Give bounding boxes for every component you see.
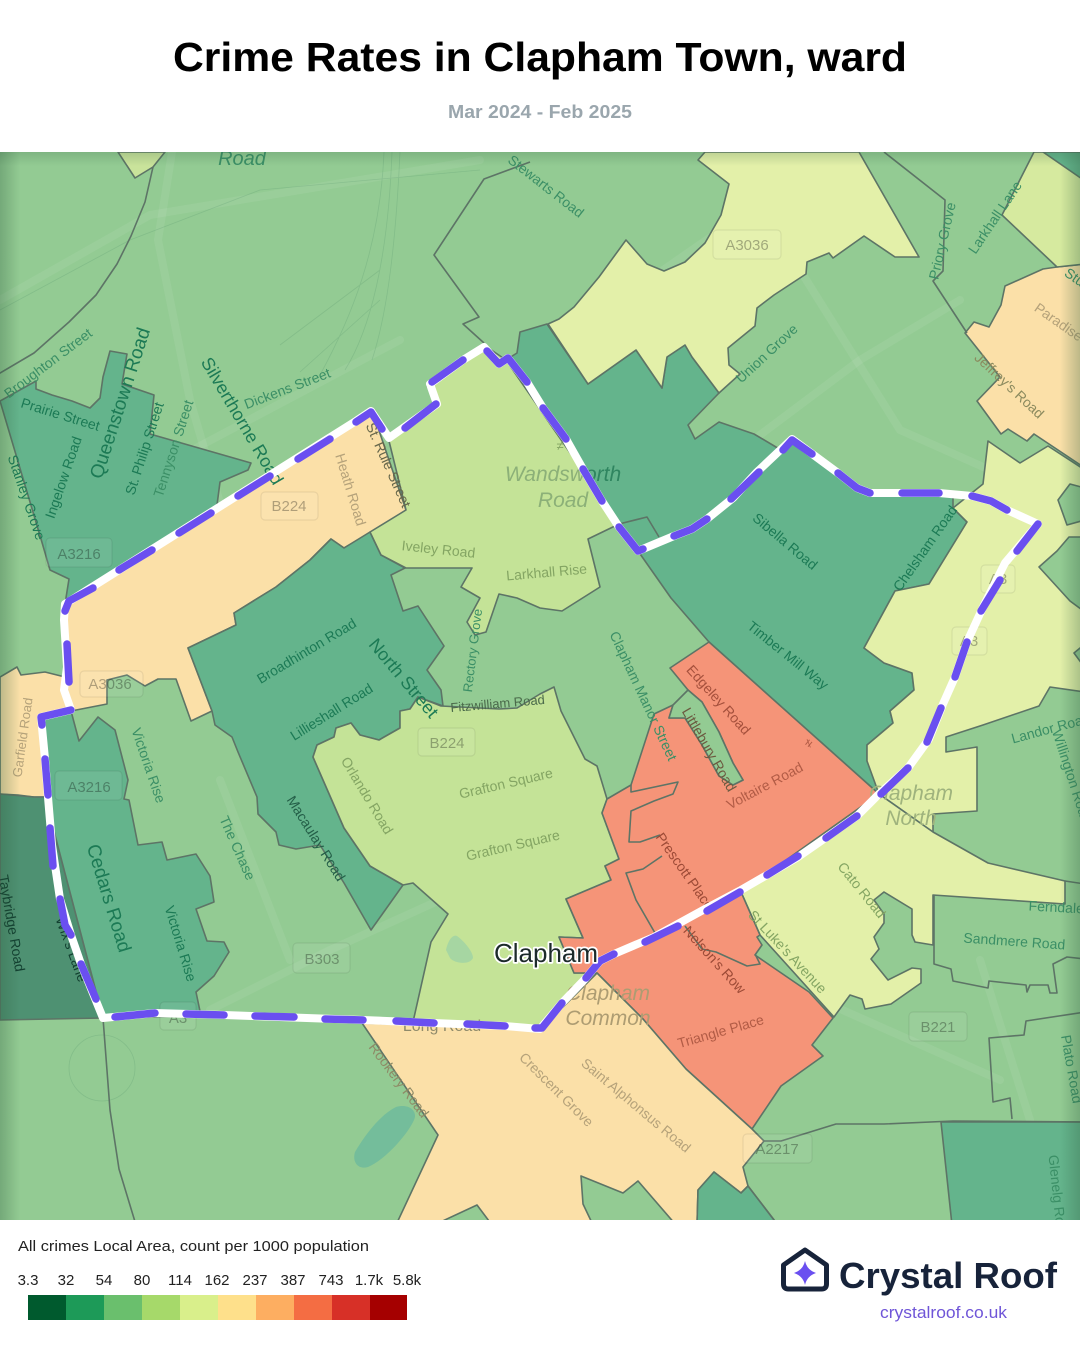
road number badges: A3: [169, 1010, 187, 1027]
street labels: Prescott Place: [653, 830, 718, 913]
street labels: The Chase: [216, 813, 259, 883]
street labels: Rectory Grove: [460, 608, 485, 693]
street labels: Timber Mill Way: [745, 618, 832, 693]
place labels: Clapham: [566, 982, 650, 1005]
road number badges: A3036: [88, 676, 132, 693]
street labels: Cedars Road: [82, 842, 135, 955]
street labels: Sandmere Road: [963, 929, 1066, 953]
legend tick labels: 80: [134, 1272, 150, 1289]
zone: Cedars teal: [40, 711, 229, 1018]
road number badges: B221: [920, 1019, 956, 1036]
internal ward boundaries: [0, 152, 1080, 1225]
street labels: Crescent Grove: [516, 1049, 597, 1130]
pond: Clapham Common small: [446, 936, 473, 963]
zone: Taybridge dark green: [0, 794, 103, 1020]
street labels: Garfield Road: [10, 697, 36, 778]
road number badges: A2217: [755, 1141, 799, 1158]
legend tick labels: [18, 1272, 422, 1289]
street labels: Stanley Grove: [5, 453, 49, 542]
road number badges: A3: [960, 633, 978, 650]
street labels: Grafton Square: [457, 765, 555, 802]
street labels: Triangle Place: [676, 1011, 766, 1051]
place labels: Road: [538, 489, 589, 512]
zone: Clapham Manor finger green: [669, 690, 743, 785]
street labels: Road: [218, 148, 267, 170]
road number badges: [46, 230, 1015, 1163]
street labels: Broughton Street: [1, 325, 95, 401]
street labels: Cato Road: [835, 859, 889, 921]
street labels: St Luke's Avenue: [745, 907, 830, 997]
street labels: Priory Grove: [925, 201, 959, 281]
legend tick labels: 114: [168, 1272, 192, 1289]
place labels: Clapham: [869, 782, 953, 805]
zone: Cato Road pale yellow: [741, 794, 1065, 1017]
legend tick labels: 162: [204, 1272, 230, 1289]
zone: Broadhinton teal: [188, 532, 444, 930]
zone: top-right pale: [1002, 152, 1080, 267]
street labels: Queenstown Road: [86, 325, 155, 481]
zone: top-left pale: [118, 152, 165, 178]
legend tick labels: 237: [242, 1272, 268, 1289]
street labels: Chelsham Road: [890, 502, 960, 594]
zone: south-east dark teal: [941, 1122, 1080, 1225]
zone: east edge green small: [1073, 647, 1080, 662]
title: Crime Rates in Clapham Town, ward: [173, 34, 907, 80]
road number badges: B224: [271, 498, 307, 515]
zone: southern peach: [362, 973, 764, 1225]
street labels: Long Road: [403, 1018, 481, 1035]
zone: Garfield peach: [0, 667, 71, 797]
legend tick labels: 3.3: [18, 1272, 38, 1289]
legend tick labels: 743: [318, 1272, 344, 1289]
road number badges: A3036: [725, 237, 769, 254]
street labels: Union Grove: [732, 321, 801, 386]
legend tick labels: 5.8k: [393, 1272, 422, 1289]
website url: crystalroof.co.uk: [880, 1304, 1008, 1322]
legend tick labels: 1.7k: [355, 1272, 384, 1289]
street labels: Broadhinton Road: [254, 615, 359, 687]
zones: east edge green: [1058, 484, 1080, 525]
icon: house with star: [784, 1250, 826, 1289]
zone: high crime red: [559, 642, 879, 1129]
street labels: Larkhall Rise: [506, 561, 588, 584]
street labels: Lillieshall Road: [287, 680, 376, 743]
street labels: ≠: [801, 736, 817, 751]
zone: top-right teal corner: [1043, 152, 1080, 181]
street labels: Sibella Road: [750, 510, 821, 573]
zone: Sibella teal: [638, 439, 967, 794]
place labels: North: [885, 807, 937, 830]
place labels: Wandsworth: [505, 463, 621, 486]
street labels: Prairie Street: [19, 395, 102, 434]
pond: Long Pond: [354, 1106, 415, 1168]
legend tick labels: 32: [58, 1272, 74, 1289]
legend tick labels: 387: [280, 1272, 306, 1289]
zone: north teal: [506, 324, 781, 551]
street labels: Wix's Lane: [53, 915, 91, 984]
zone: Grafton Square light green: [313, 687, 619, 1030]
faint road network: [0, 152, 862, 1102]
road number badges: A3: [989, 571, 1007, 588]
street labels: Clapham Manor Street: [607, 629, 681, 763]
street labels: Orlando Road: [338, 754, 397, 837]
street labels: North Street: [365, 635, 442, 722]
street labels: Victoria Rise: [128, 726, 169, 805]
street labels: Saint Alphonsus Road: [578, 1055, 694, 1156]
street labels: Voltaire Road: [724, 759, 806, 812]
street labels: Heath Road: [332, 451, 369, 528]
street labels: Iveley Road: [401, 537, 476, 561]
zone: Wandsworth Road light green: [370, 345, 638, 635]
ward boundary purple dashes: [41, 351, 1038, 1028]
map edge vignette: [0, 152, 1080, 1220]
street labels: Macaulay Road: [284, 793, 349, 884]
ward boundary: Clapham Town: [41, 347, 1038, 1029]
place labels: [505, 463, 953, 1030]
street labels: Fitzwilliam Road: [450, 692, 545, 715]
legend: [18, 1238, 422, 1320]
street labels: ≠: [556, 438, 564, 453]
zone: east edge green lower: [1039, 537, 1080, 612]
street labels: Ingelow Road: [42, 434, 85, 520]
street labels: Edgeley Road: [683, 662, 754, 738]
street labels: St. Rule Street: [363, 420, 414, 510]
street labels: Victoria Rise: [162, 904, 200, 984]
street labels: Grafton Square: [464, 827, 562, 864]
zone: Paradise peach: [965, 264, 1080, 468]
logo: Crystal Roof: [784, 1250, 1058, 1322]
legend colour scale: [28, 1295, 407, 1320]
map base zone: [0, 152, 1080, 1220]
street labels: Tennyson Street: [150, 398, 197, 499]
wordmark: Crystal Roof: [839, 1255, 1058, 1296]
road number badges: B303: [304, 951, 340, 968]
road number badges: A3216: [57, 546, 101, 563]
road number badges: B224: [429, 735, 465, 752]
legend title: All crimes Local Area, count per 1000 population: [18, 1238, 369, 1255]
zone: Queenstown teal: [0, 351, 251, 604]
street labels: Silverthorne Road: [197, 354, 287, 488]
street labels: Littlebury Road: [679, 705, 740, 794]
street labels: Rookery Road: [366, 1039, 432, 1121]
zone: north pale yellow: [548, 152, 919, 393]
subtitle: date range: Mar 2024 - Feb 2025: [448, 102, 632, 122]
street labels: Dickens Street: [242, 365, 333, 412]
zone: southern teal: [697, 1172, 778, 1225]
legend tick labels: 54: [96, 1272, 112, 1289]
street labels: Larkhall Lane: [965, 178, 1025, 257]
zone: Clapham High Street peach: [65, 410, 406, 721]
street labels: St. Philip Street: [122, 400, 167, 497]
street labels: Nelson's Row: [680, 923, 750, 997]
street labels: Glenelg Road: [1046, 1154, 1070, 1241]
street labels: Stewarts Road: [505, 151, 587, 221]
road number badges: A3216: [67, 779, 111, 796]
place label: Clapham: Clapham: [494, 938, 598, 968]
street labels: Jeffrey's Road: [971, 349, 1047, 421]
zone: Clapham North pale yellow: [864, 441, 1080, 832]
place labels: Common: [565, 1007, 651, 1030]
